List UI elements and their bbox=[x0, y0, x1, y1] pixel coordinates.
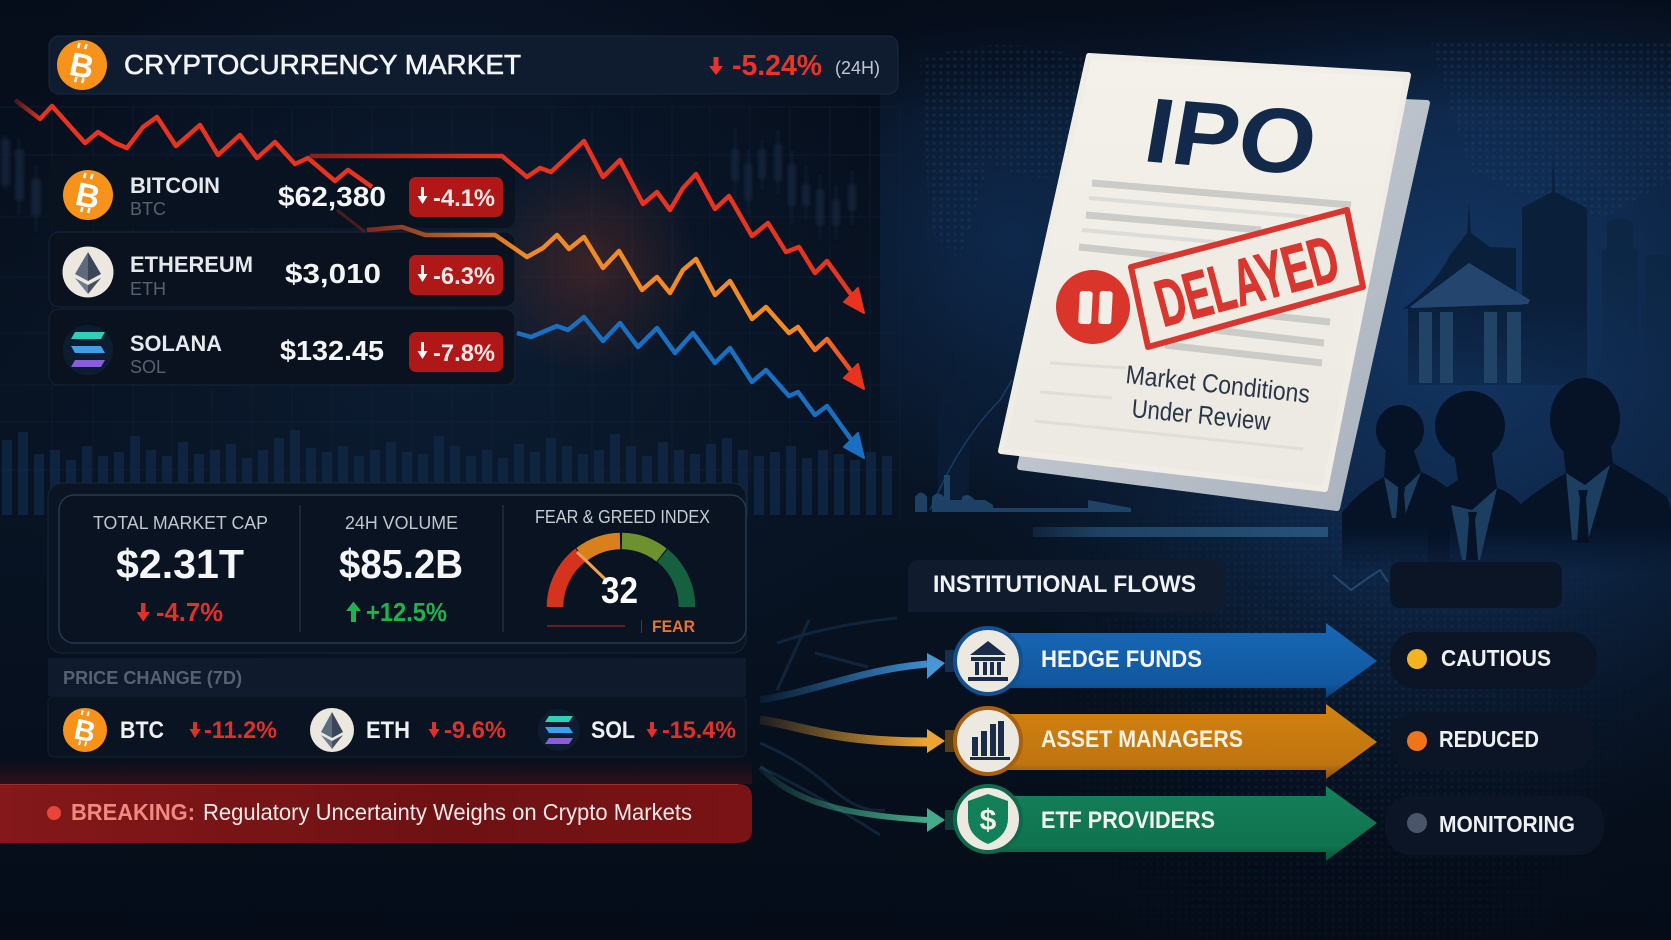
stat: 24h volume: 24H VOLUME bbox=[345, 513, 458, 533]
banner: breaking news: BREAKING: bbox=[71, 799, 195, 825]
chart: first red segment bbox=[15, 100, 372, 232]
back sheet bbox=[1020, 90, 1427, 508]
flow: asset managers bbox=[760, 704, 1377, 779]
stat: total market cap: $2.31T bbox=[116, 541, 244, 587]
panel: price change 7d bbox=[48, 658, 746, 757]
row: bitcoin: BTC bbox=[130, 199, 166, 219]
gauge: fear and greed index: FEAR & GREED INDEX bbox=[535, 507, 710, 527]
caption: Market Conditions bbox=[1124, 359, 1312, 409]
faint flow curves bbox=[760, 618, 897, 835]
row: solana: SOLANA bbox=[130, 331, 222, 356]
icon: shield bbox=[955, 786, 1021, 852]
panel: coin list bbox=[62, 170, 503, 377]
stat: total market cap: TOTAL MARKET CAP bbox=[93, 513, 268, 533]
text lines bbox=[1035, 183, 1351, 449]
icon: bitcoin coin: B bbox=[66, 45, 97, 86]
item: btc: -11.2% bbox=[204, 717, 277, 744]
panel: institutional flows bbox=[760, 560, 1604, 861]
badge: -4.1% bbox=[433, 185, 495, 212]
inflow arrow bbox=[760, 720, 945, 753]
status: monitoring bbox=[1385, 796, 1604, 855]
row: solana: $132.45 bbox=[280, 335, 384, 366]
icon: pause bbox=[1056, 270, 1130, 344]
gauge: fear and greed index: 32 bbox=[601, 570, 638, 611]
item: sol bbox=[538, 709, 736, 751]
line: solana price bbox=[517, 317, 864, 458]
silhouettes of three executives bbox=[1342, 378, 1671, 575]
row: ethereum: ETH bbox=[130, 279, 166, 299]
stat: 24h volume bbox=[339, 513, 463, 627]
line: ethereum price bbox=[367, 227, 864, 389]
flow: asset managers: ASSET MANAGERS bbox=[1041, 726, 1243, 753]
chart grid bbox=[0, 107, 900, 520]
row: ethereum bbox=[62, 246, 503, 299]
stat: 24h volume: +12.5% bbox=[366, 597, 447, 627]
status: cautious bbox=[1390, 632, 1597, 689]
icon: bitcoin bbox=[63, 170, 113, 220]
row: solana: SOL bbox=[130, 357, 166, 377]
flow: hedge funds: HEDGE FUNDS bbox=[1041, 646, 1202, 673]
panel: market header bbox=[49, 36, 898, 94]
row: solana bbox=[63, 325, 503, 377]
icon: bank bbox=[955, 628, 1021, 694]
icon: bitcoin: B bbox=[72, 175, 103, 216]
status: reduced bbox=[1390, 713, 1594, 771]
badge bbox=[409, 332, 503, 372]
item: btc: B bbox=[71, 714, 98, 749]
icon: bar chart bbox=[955, 708, 1021, 774]
market change bbox=[709, 50, 880, 82]
document: IPO delayed bbox=[1001, 56, 1427, 508]
row: ethereum: ETHEREUM bbox=[130, 252, 253, 277]
flow: etf providers: ETF PROVIDERS bbox=[1041, 807, 1215, 834]
front sheet bbox=[1001, 56, 1408, 489]
flow: hedge funds bbox=[760, 623, 1377, 700]
gauge: fear and greed index: FEAR bbox=[652, 617, 695, 636]
chart: falling price lines bbox=[310, 141, 864, 458]
caption bbox=[1124, 359, 1312, 436]
item: btc bbox=[63, 708, 277, 752]
badge: -6.3% bbox=[433, 263, 495, 290]
stat: total market cap: -4.7% bbox=[156, 597, 223, 627]
icon: bitcoin coin bbox=[57, 40, 107, 90]
inflow arrow bbox=[760, 767, 945, 832]
icon: shield: $ bbox=[980, 804, 997, 837]
item: eth: ETH bbox=[366, 717, 410, 744]
icon: solana bbox=[63, 325, 113, 375]
icon: ethereum bbox=[62, 246, 114, 298]
gauge: fear and greed index bbox=[535, 507, 710, 636]
stamp: delayed bbox=[1131, 210, 1363, 347]
volume bars bbox=[2, 430, 892, 515]
item: sol: SOL bbox=[591, 717, 635, 744]
banner: breaking news bbox=[0, 758, 752, 843]
badge: -7.8% bbox=[433, 340, 495, 367]
row: bitcoin: BITCOIN bbox=[130, 173, 220, 198]
badge bbox=[409, 255, 503, 295]
item: sol: -15.4% bbox=[662, 717, 736, 744]
right backdrop: city, bank building and skyline bbox=[915, 153, 1671, 537]
empty placeholder pill bbox=[1390, 562, 1562, 608]
item: btc: BTC bbox=[120, 717, 164, 744]
market change: -5.24% bbox=[732, 50, 822, 82]
row: bitcoin bbox=[63, 170, 503, 220]
title: CRYPTOCURRENCY MARKET bbox=[124, 49, 521, 80]
stat: 24h volume: $85.2B bbox=[339, 541, 463, 587]
status: monitoring: MONITORING bbox=[1439, 811, 1575, 837]
panel: market stats bbox=[48, 483, 746, 653]
market change: (24H) bbox=[835, 58, 880, 78]
heading bbox=[908, 560, 1225, 612]
item: eth bbox=[310, 708, 506, 752]
item: eth: -9.6% bbox=[444, 717, 506, 744]
line: bitcoin price bbox=[310, 141, 864, 313]
flow: etf providers bbox=[760, 767, 1377, 861]
status: cautious: CAUTIOUS bbox=[1441, 645, 1551, 671]
row: bitcoin: $62,380 bbox=[278, 181, 386, 212]
badge bbox=[409, 177, 503, 217]
caption: Under Review bbox=[1130, 393, 1272, 436]
candlesticks bbox=[2, 128, 855, 240]
inflow arrow bbox=[760, 653, 945, 700]
heading: INSTITUTIONAL FLOWS bbox=[933, 571, 1196, 598]
status: reduced: REDUCED bbox=[1439, 726, 1539, 752]
coin list row backgrounds bbox=[49, 157, 515, 385]
heading: PRICE CHANGE (7D) bbox=[63, 668, 242, 688]
small faint line chart bbox=[1333, 570, 1388, 590]
stamp: delayed: DELAYED bbox=[1147, 221, 1346, 341]
banner: breaking news: Regulatory Uncertainty Weighs on Crypto Markets bbox=[203, 799, 692, 825]
stat: total market cap bbox=[93, 513, 268, 627]
row: ethereum: $3,010 bbox=[285, 258, 381, 289]
heading: IPO: IPO bbox=[1138, 79, 1324, 195]
